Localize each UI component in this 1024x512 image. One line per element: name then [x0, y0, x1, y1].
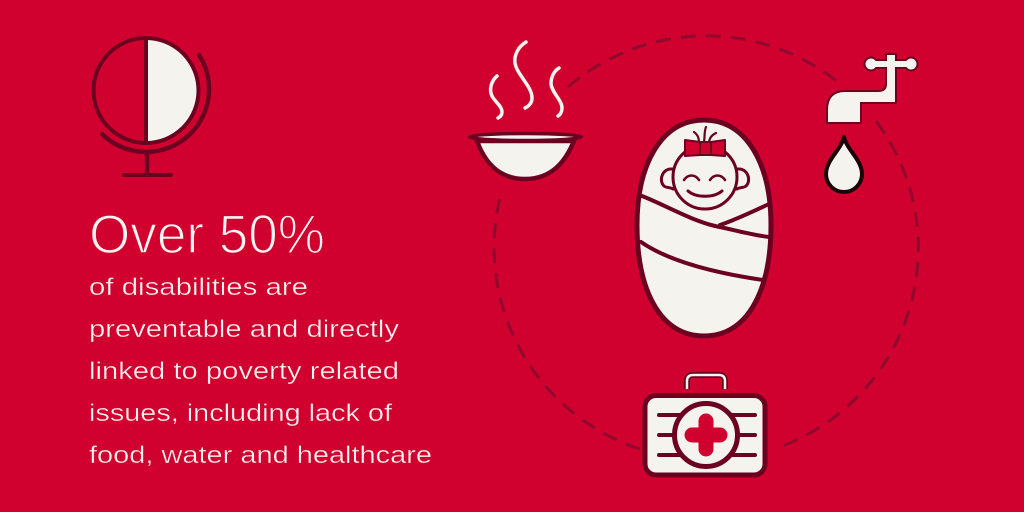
icon: water tap	[826, 55, 916, 192]
icon: steaming bowl	[470, 42, 582, 179]
red cross	[692, 421, 720, 449]
handle	[687, 375, 725, 389]
icon: swaddled baby	[637, 120, 771, 336]
tap body and handle	[828, 55, 916, 122]
text block: description: food, water and healthcare	[89, 442, 432, 469]
icon: first aid kit	[645, 375, 765, 475]
bow	[685, 140, 725, 156]
text block: description: linked to poverty related	[89, 358, 399, 385]
steam	[491, 42, 562, 118]
dashed circle connecting the icons	[494, 36, 918, 449]
face	[673, 145, 737, 209]
smile	[688, 191, 722, 196]
stripes	[659, 415, 755, 455]
bowl	[477, 141, 574, 179]
case	[645, 396, 765, 475]
swaddle wraps	[642, 196, 769, 237]
text block: description: preventable and directly	[89, 316, 400, 343]
icon: half-filled globe	[94, 38, 209, 175]
swaddle outline	[637, 120, 771, 336]
hair	[694, 127, 716, 142]
heading: over 50%: Over 50%	[89, 203, 325, 265]
emblem	[674, 404, 738, 466]
text block: description: of disabilities are	[89, 274, 308, 301]
bowl rim	[470, 134, 582, 140]
ears	[661, 169, 673, 189]
eyes	[684, 176, 699, 180]
text block: description: issues, including lack of	[89, 400, 392, 427]
text block: description	[89, 274, 432, 469]
water drop	[826, 137, 862, 192]
